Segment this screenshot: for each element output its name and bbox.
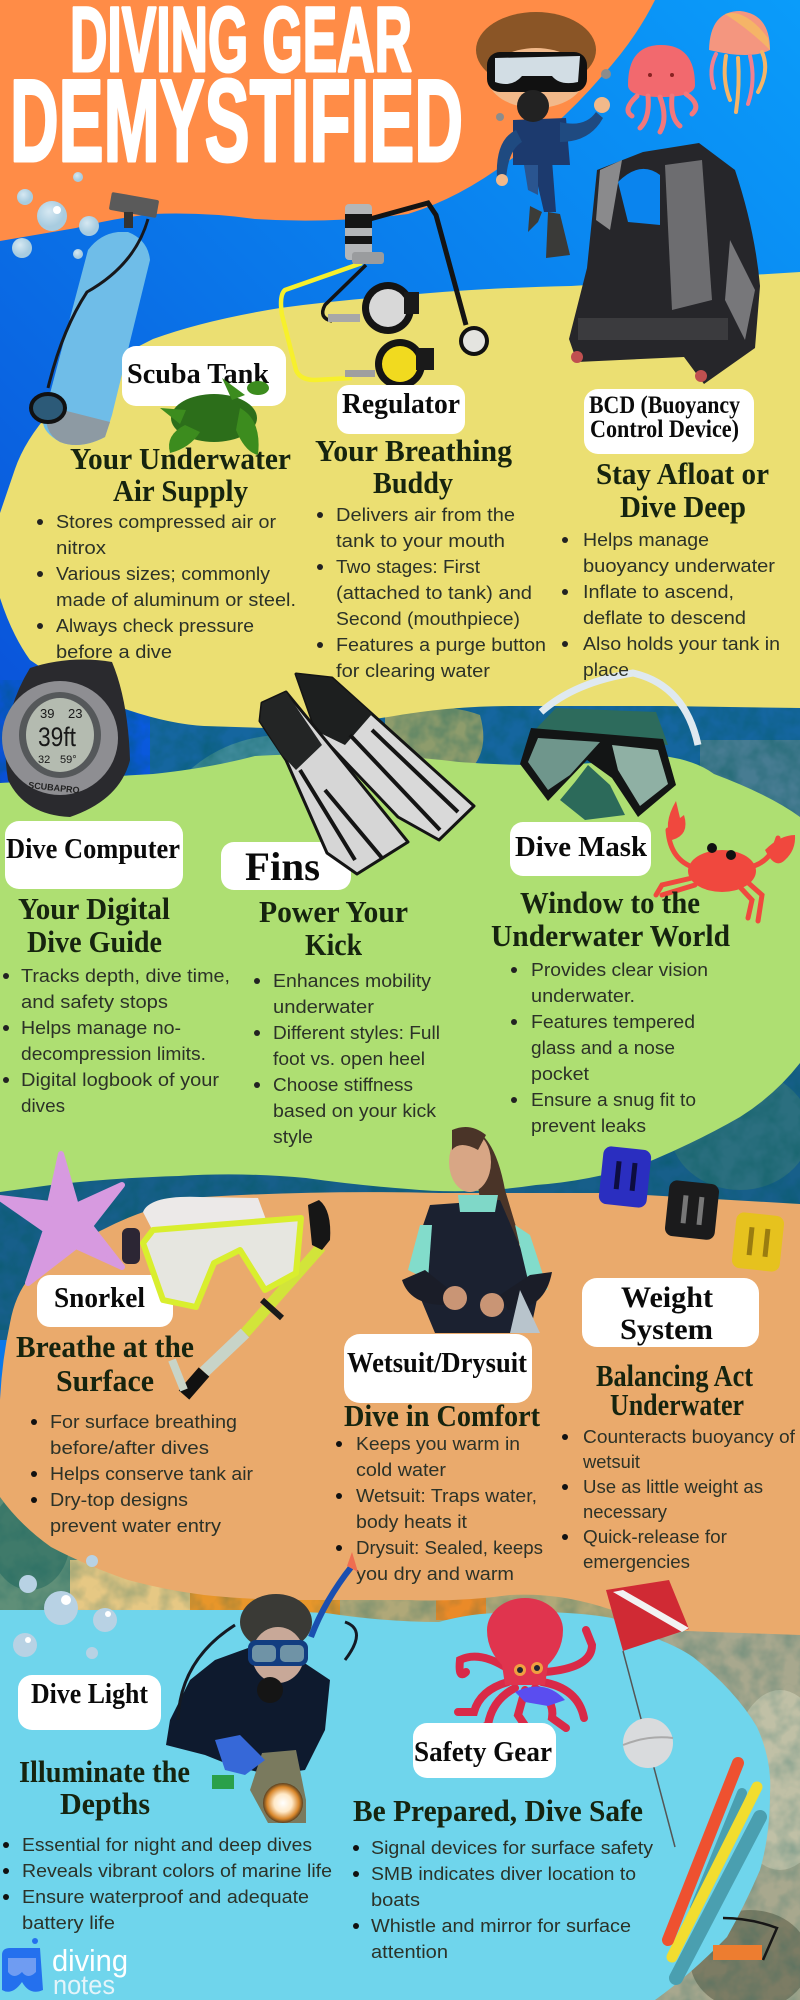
list: wetsuit points: body heats it (356, 1512, 467, 1532)
label: safety gear: Safety Gear (414, 1736, 552, 1768)
background: ocean blue (0, 0, 800, 800)
icon: dive computer: SCUBAPRO (28, 780, 80, 795)
label: BCD: BCD (Buoyancy (589, 392, 740, 419)
list: regulator points: (attached to tank) and (336, 583, 532, 603)
list: BCD points: deflate to descend (583, 608, 746, 628)
list: wetsuit points (336, 1434, 543, 1584)
list: regulator points (317, 505, 546, 681)
list: dive computer points: Tracks depth, dive time, (21, 966, 230, 986)
list: wetsuit points: Wetsuit: Traps water, (356, 1486, 537, 1506)
panel: dive light (3, 1552, 358, 1933)
list: fins points: foot vs. open heel (273, 1049, 425, 1069)
heading: balancing act underwater: Underwater (610, 1387, 744, 1422)
label: fins: Fins (245, 844, 320, 889)
list: snorkel points: Dry-top designs (50, 1490, 188, 1510)
title (10, 0, 463, 186)
heading: your underwater air supply: Air Supply (113, 473, 248, 508)
list: safety gear points: Whistle and mirror for surface (371, 1916, 631, 1936)
panel: fins (221, 674, 474, 1147)
list: fins points: Different styles: Full (273, 1023, 440, 1043)
heading: your breathing buddy: Your Breathing (315, 433, 512, 468)
label: BCD (584, 389, 754, 454)
panel: scuba tank (31, 192, 296, 662)
icon: dive computer: 39 (40, 706, 54, 721)
panel: regulator (281, 203, 546, 681)
heading: your digital dive guide: Your Digital (18, 891, 170, 926)
heading: dive in comfort: Dive in Comfort (344, 1398, 541, 1433)
label: weight system (582, 1278, 759, 1347)
heading: power your kick: Power Your (259, 894, 408, 929)
list: BCD points (562, 530, 780, 654)
icon: octopus (458, 1598, 592, 1733)
icon: BCD jacket (569, 143, 760, 384)
list: scuba tank points: Stores compressed air or (56, 512, 276, 532)
panel: wetsuit (336, 1127, 552, 1584)
list: snorkel points: Helps conserve tank air (50, 1464, 253, 1484)
list: wetsuit points: you dry and warm (356, 1564, 514, 1584)
list: weight points: Use as little weight as (583, 1477, 763, 1497)
list: safety gear points: attention (371, 1942, 448, 1962)
list: dive mask points: Provides clear vision (531, 960, 708, 980)
label: scuba tank: Scuba Tank (127, 358, 270, 390)
heading: stay afloat or dive deep: Stay Afloat or (596, 456, 769, 491)
label: weight system: System (620, 1313, 713, 1346)
icon: fins (260, 674, 474, 874)
list: regulator points: for clearing water (336, 661, 490, 681)
blob: light blue panel (0, 1610, 770, 2000)
heading: stay afloat or dive deep (596, 456, 769, 524)
list: safety gear points: SMB indicates diver location to (371, 1864, 636, 1884)
blob: green panel (0, 754, 800, 1192)
list: weight points: Quick-release for (583, 1527, 727, 1547)
list: regulator points: Second (mouthpiece) (336, 609, 520, 629)
list: dive light points (3, 1835, 332, 1933)
heading: your digital dive guide: Dive Guide (27, 924, 162, 959)
bubbles near tank (12, 172, 99, 259)
icon: dive computer: 32 (38, 754, 50, 766)
list: fins points: Enhances mobility (273, 971, 431, 991)
list: dive mask points: underwater. (531, 986, 635, 1006)
list: wetsuit points: cold water (356, 1460, 446, 1480)
illustration: pink jellyfish (628, 45, 696, 132)
blob: orange title panel (0, 0, 655, 241)
blob: yellow panel (0, 272, 800, 728)
list: weight points (562, 1427, 796, 1572)
list: scuba tank points: before a dive (56, 642, 172, 662)
bubbles near dive light (13, 1555, 117, 1659)
list: fins points (254, 971, 440, 1147)
list: weight points: wetsuit (582, 1452, 640, 1472)
list: wetsuit points: Drysuit: Sealed, keeps (356, 1538, 543, 1558)
title: DEMYSTIFIED (10, 55, 463, 186)
label: wetsuit drysuit: Wetsuit/Drysuit (347, 1348, 528, 1379)
list: dive mask points: prevent leaks (531, 1116, 646, 1136)
icon: starfish (0, 1154, 122, 1283)
list: regulator points: Delivers air from the (336, 505, 515, 525)
list: dive light points: Ensure waterproof and adequate (22, 1887, 309, 1907)
list: fins points: Choose stiffness (273, 1075, 413, 1095)
heading: breathe at the surface (16, 1329, 194, 1398)
icon: dive mask (520, 673, 698, 820)
list: dive mask points: Ensure a snug fit to (531, 1090, 696, 1110)
list: regulator points: Features a purge button (336, 635, 546, 655)
list: dive computer points: dives (21, 1096, 65, 1116)
panel: dive computer (2, 660, 230, 1116)
label: dive light (18, 1675, 161, 1730)
label: regulator: Regulator (342, 388, 460, 420)
list: scuba tank points (37, 512, 296, 662)
heading: balancing act underwater: Balancing Act (596, 1358, 754, 1393)
label: safety gear (413, 1723, 556, 1778)
panel: dive mask (491, 673, 795, 1136)
illustration: cartoon diver (476, 12, 611, 258)
list: BCD points: Helps manage (583, 530, 709, 550)
heading: breathe at the surface: Surface (56, 1363, 154, 1398)
list: wetsuit points: Keeps you warm in (356, 1434, 520, 1454)
icon: dive computer: 39ft (38, 722, 76, 752)
panel: safety gear (353, 1580, 777, 1978)
list: scuba tank points: Always check pressure (56, 616, 254, 636)
icon: turtle (160, 378, 269, 455)
heading: your underwater air supply (70, 441, 291, 508)
icon: regulator (281, 203, 489, 389)
label: wetsuit drysuit (344, 1334, 532, 1403)
heading: power your kick: Kick (305, 927, 363, 962)
icon: scuba tank (31, 192, 159, 445)
heading: window to the underwater world: Underwater World (491, 918, 730, 953)
label: regulator (337, 385, 465, 434)
heading: illuminate the depths (19, 1754, 190, 1821)
list: snorkel points: before/after dives (50, 1438, 209, 1458)
list: regulator points: tank to your mouth (336, 531, 505, 551)
list: dive computer points: Digital logbook of your (21, 1070, 219, 1090)
heading: illuminate the depths: Depths (60, 1786, 150, 1821)
list: dive computer points: and safety stops (21, 992, 168, 1012)
panel: weight system (562, 1146, 796, 1572)
heading: your underwater air supply: Your Underwater (70, 441, 291, 476)
heading: your breathing buddy (315, 433, 512, 500)
heading: your digital dive guide (18, 891, 170, 959)
text: place (last BCD line, above the mask strap): place (583, 660, 629, 680)
icon: diver with torch (166, 1552, 358, 1823)
panel: BCD (562, 143, 780, 654)
list: scuba tank points: made of aluminum or steel. (56, 590, 296, 610)
icon: dive flag with buoy line (606, 1580, 689, 1847)
label: snorkel: Snorkel (54, 1282, 145, 1314)
blob: tan panel (0, 1192, 800, 1635)
icon: crab (656, 801, 795, 921)
heading: your breathing buddy: Buddy (373, 465, 453, 500)
label: dive computer (5, 821, 183, 889)
label: BCD: Control Device) (590, 416, 739, 443)
icon: dive computer: 23 (68, 706, 82, 721)
list: weight points: necessary (583, 1502, 667, 1522)
label: dive mask: Dive Mask (515, 831, 648, 863)
list: fins points: based on your kick (273, 1101, 437, 1121)
list: dive mask points: Features tempered (531, 1012, 695, 1032)
list: scuba tank points: Various sizes; commonly (56, 564, 270, 584)
icon: dive computer: 59° (60, 754, 77, 766)
list: dive mask points (511, 960, 708, 1136)
list: snorkel points (31, 1412, 253, 1536)
label: snorkel (37, 1275, 173, 1327)
label: dive mask (510, 822, 651, 876)
illustration: orange jellyfish (709, 11, 770, 112)
icon: signal tubes and whistle (668, 1763, 777, 1978)
list: fins points: underwater (273, 997, 374, 1017)
heading: illuminate the depths: Illuminate the (19, 1754, 190, 1789)
heading: window to the underwater world (491, 885, 730, 953)
list: dive computer points: Helps manage no- (21, 1018, 181, 1038)
list: dive mask points: glass and a nose (531, 1038, 675, 1058)
list: dive computer points: decompression limits. (21, 1044, 206, 1064)
list: fins points: style (273, 1127, 313, 1147)
list: dive light points: Reveals vibrant colors of marine life (22, 1861, 332, 1881)
panel: snorkel (16, 1197, 330, 1536)
heading: balancing act underwater (596, 1358, 754, 1422)
list: snorkel points: prevent water entry (50, 1516, 221, 1536)
background: reef photo strips (0, 680, 800, 2000)
label: weight system: Weight (621, 1281, 713, 1314)
heading: breathe at the surface: Breathe at the (16, 1329, 194, 1364)
list: snorkel points: For surface breathing (50, 1412, 237, 1432)
label: fins (221, 842, 351, 890)
list: BCD points: buoyancy underwater (583, 556, 775, 576)
logo: diving notes: diving (52, 1943, 128, 1978)
list: safety gear points (353, 1838, 653, 1962)
list: weight points: Counteracts buoyancy of (583, 1427, 796, 1447)
list: dive light points: battery life (22, 1913, 115, 1933)
heading: window to the underwater world: Window to the (520, 885, 700, 920)
icon: weights (598, 1146, 785, 1272)
logo: diving notes: notes (53, 1970, 115, 2000)
list: BCD points: Inflate to ascend, (583, 582, 734, 602)
list: regulator points: Two stages: First (336, 557, 480, 577)
label: dive light: Dive Light (31, 1679, 149, 1710)
heading: stay afloat or dive deep: Dive Deep (620, 489, 746, 524)
list: dive mask points: pocket (531, 1064, 589, 1084)
list: safety gear points: boats (371, 1890, 420, 1910)
label: dive computer: Dive Computer (6, 834, 180, 865)
icon: woman in wetsuit (402, 1127, 552, 1333)
heading: be prepared dive safe: Be Prepared, Dive Safe (353, 1793, 643, 1828)
list: weight points: emergencies (583, 1552, 690, 1572)
label: scuba tank (122, 346, 286, 406)
list: dive light points: Essential for night and deep dives (22, 1835, 312, 1855)
list: dive computer points (3, 966, 230, 1116)
list: safety gear points: Signal devices for surface safety (371, 1838, 653, 1858)
list: scuba tank points: nitrox (56, 538, 106, 558)
icon: snorkel and mask (122, 1197, 330, 1395)
heading: power your kick (259, 894, 408, 962)
list: BCD points: Also holds your tank in (583, 634, 780, 654)
logo: diving notes (2, 1938, 128, 2000)
icon: dive computer (2, 660, 130, 817)
